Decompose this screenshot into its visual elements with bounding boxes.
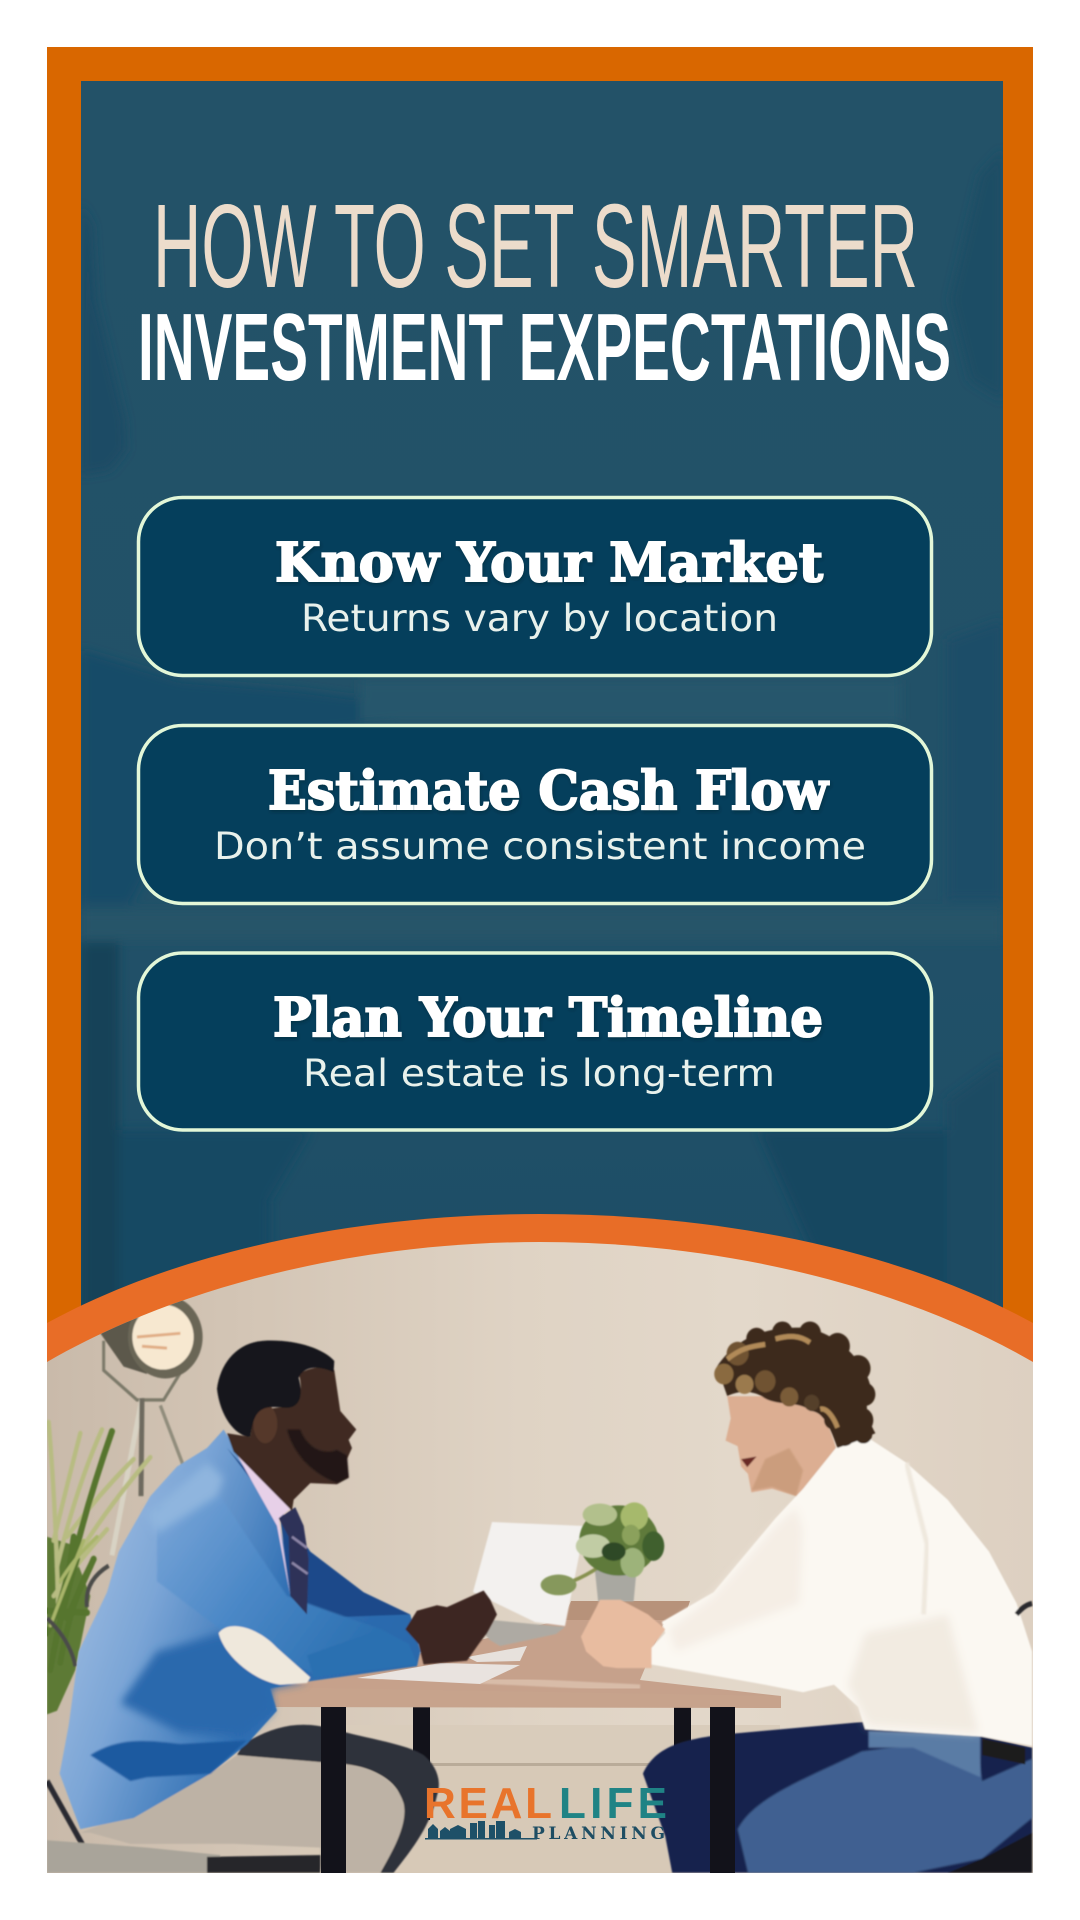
card: know your market: Know Your Market xyxy=(275,532,824,594)
card: estimate cash flow: Don’t assume consistent income xyxy=(214,825,866,868)
laptop xyxy=(470,1522,585,1646)
card: estimate cash flow: Estimate Cash Flow xyxy=(268,760,829,822)
card: plan your timeline: Plan Your Timeline xyxy=(273,987,823,1049)
trousers xyxy=(237,1725,439,1873)
lamp xyxy=(100,1296,203,1555)
right man xyxy=(581,1321,1032,1873)
face xyxy=(726,1396,836,1496)
icon: city skyline xyxy=(425,1821,537,1840)
plant xyxy=(47,1422,150,1714)
left man xyxy=(60,1340,497,1873)
jacket xyxy=(60,1430,420,1829)
logo: Real Life Planning: LIFE xyxy=(559,1779,667,1828)
card: estimate cash flow xyxy=(138,726,932,904)
orange arc band xyxy=(47,1214,1033,1400)
face and neck xyxy=(227,1367,356,1511)
hair xyxy=(714,1321,875,1448)
card: know your market xyxy=(138,498,932,676)
logo: Real Life Planning xyxy=(424,1779,667,1844)
dark teal panel with ghosted photo xyxy=(81,81,1003,1400)
potted plant xyxy=(541,1502,664,1602)
chairs xyxy=(47,1566,109,1666)
title xyxy=(138,180,951,401)
floor and baseboard xyxy=(428,1725,780,1873)
jeans xyxy=(643,1722,1032,1873)
card: know your market: Returns vary by location xyxy=(301,597,778,640)
hands xyxy=(405,1590,497,1664)
hair xyxy=(217,1340,334,1437)
card: plan your timeline xyxy=(138,953,932,1130)
papers xyxy=(357,1663,520,1684)
left background: lamp, plant, chair xyxy=(47,1296,324,1873)
card: plan your timeline: Real estate is long-term xyxy=(303,1052,775,1095)
elbow patch xyxy=(219,1626,310,1685)
photo: two men meeting at a table xyxy=(47,1200,1033,1877)
wooden table top and back legs xyxy=(269,1601,781,1820)
chair back xyxy=(1017,1603,1032,1614)
orange frame xyxy=(47,47,1033,1387)
hands xyxy=(581,1600,665,1668)
front table legs xyxy=(321,1707,735,1877)
shirt and tie xyxy=(235,1452,292,1596)
logo: Real Life Planning: REAL xyxy=(424,1779,552,1828)
logo: Real Life Planning: PLANNING xyxy=(532,1824,665,1844)
shirt xyxy=(652,1437,1032,1746)
